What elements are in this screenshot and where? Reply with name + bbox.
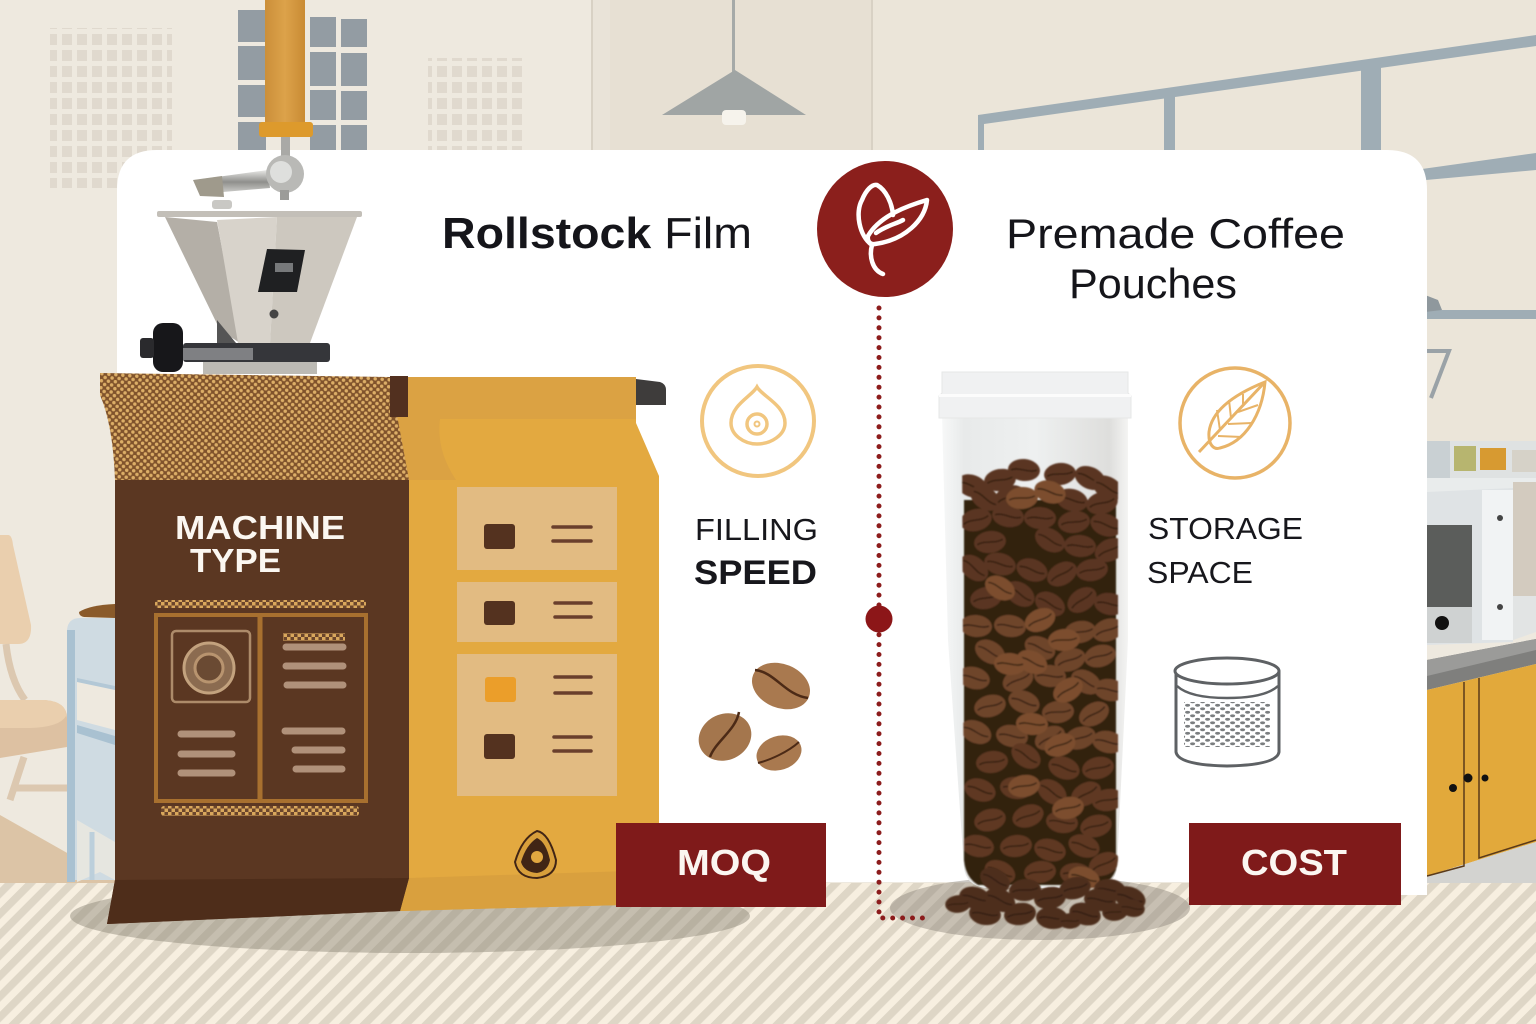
icon: storage canister [1175,658,1279,766]
window behind grinder [238,10,367,152]
label: storage space: SPACE [1147,555,1253,590]
dotted divider line [879,308,930,918]
divider node [866,606,892,632]
pendant lamp [662,0,806,125]
striped floor [0,883,1536,1024]
spilled bean pile [944,862,1149,930]
dotted wall panel centre [428,58,522,154]
icon: central leaf logo [817,161,953,297]
heading: Premade Coffee Pouches: Pouches [1069,260,1237,307]
badge: MOQ [616,823,826,907]
bag front brown panel [107,480,409,924]
badge: COST [1189,823,1401,905]
bag clip [636,379,666,405]
badge: COST: COST [1241,842,1347,883]
icon: leaf [1180,368,1290,478]
heading: machine type [175,509,345,579]
bag bottom yellow fold [400,870,659,911]
heading: Premade Coffee Pouches [1006,210,1345,307]
grinder machine [140,137,362,374]
white comparison panel [117,150,1427,895]
bag side yellow panel [390,377,659,911]
icon: droplet [702,366,814,476]
bag side upper band [390,377,636,480]
dotted wall panel left [50,28,172,188]
heading: machine type: MACHINE [175,509,345,546]
pouch of coffee beans [939,372,1149,930]
label: filling speed: SPEED [694,554,817,592]
heading: Rollstock Film: Rollstock Film [442,209,752,258]
label: filling speed [694,512,818,592]
pouch floor shadow [890,876,1190,940]
heading: machine type: TYPE [190,542,281,579]
bag seal block [390,376,408,417]
chair and side table on left [0,535,115,884]
coffee bag: rollstock film [100,373,666,924]
badge: MOQ: MOQ [677,842,771,883]
pouch clear cap [939,372,1131,418]
bag emblem [515,831,556,878]
window frame rails [978,35,1536,398]
label: filling speed: FILLING [695,512,818,547]
counter and coffee machine on right [1427,441,1536,884]
icon: coffee beans [691,654,817,776]
label: storage space: STORAGE [1148,511,1303,546]
bag info rows [457,487,617,796]
bag bottom fold [107,878,409,924]
beans inside pouch [961,458,1120,889]
heading: Premade Coffee Pouches: Premade Coffee [1006,210,1345,257]
machine diagram on bag [155,600,366,816]
label: storage space [1147,511,1303,590]
bag front halftone top [100,373,409,480]
bag floor shadow [70,879,750,953]
pouch glass body [942,415,1128,888]
orange filling column [259,0,313,137]
